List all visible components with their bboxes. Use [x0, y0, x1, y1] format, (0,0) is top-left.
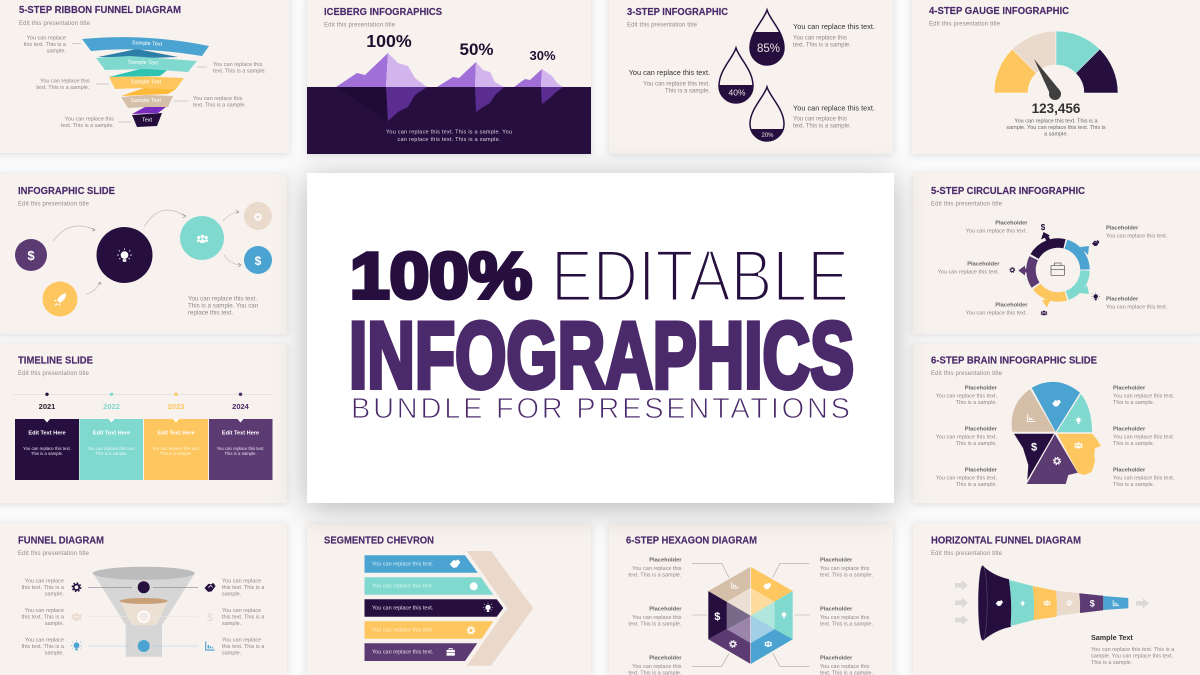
funnel text left: You can replace: [25, 578, 64, 584]
panel: 4-step gauge infographic: Edit this presentation title: [929, 22, 1001, 28]
dark water band: [307, 87, 591, 154]
panel: 5-step circular infographic: [913, 173, 1200, 334]
funnel text left: You can replace: [25, 638, 64, 644]
droplet labels: This is a sample.: [665, 88, 710, 94]
panel: infographic slide: Edit this presentation title: [18, 202, 90, 208]
brain labels right: This is a sample.: [1113, 482, 1155, 488]
chevron bar 2: [364, 577, 493, 595]
timeline card 2022: This is a sample.: [95, 451, 128, 456]
circular labels: Placeholder: [1106, 296, 1139, 302]
panel: segmented chevron: [307, 524, 591, 675]
funnel graphic: [93, 567, 195, 657]
timeline card 2024: This is a sample.: [224, 451, 257, 456]
panel: timeline slide: TIMELINE SLIDE: [18, 356, 93, 366]
brain labels left: [936, 386, 998, 488]
droplet 20%: [750, 87, 784, 141]
ribbon funnel callouts: text. This is a sample.: [193, 102, 247, 108]
head icons: $: [1031, 442, 1037, 454]
panel: iceberg infographics: Edit this presentation title: [324, 22, 396, 28]
brain labels left: You can replace this text.: [936, 394, 997, 400]
droplet labels: text. This is a sample.: [793, 124, 851, 130]
panel: 5-step circular infographic: Edit this presentation title: [931, 202, 1003, 208]
hexagon labels right: You can replace this: [820, 566, 870, 572]
funnel text left: You can replace: [25, 608, 64, 614]
timeline card 2023: Edit Text Here: [157, 430, 195, 436]
timeline card 2024: You can replace this text.: [217, 446, 264, 451]
circular labels: Placeholder: [995, 220, 1028, 226]
panel: horizontal funnel diagram: [913, 523, 1200, 675]
iceberg 30%: [514, 48, 563, 104]
gauge caption: [1006, 118, 1106, 138]
sample text block: This is a sample.: [1091, 660, 1133, 666]
panel: funnel diagram: [0, 523, 287, 675]
iceberg 100%: [336, 31, 427, 121]
timeline axis: [14, 393, 272, 411]
panel: 3-step infographic: Edit this presentation title: [627, 22, 698, 28]
node: gear: [244, 202, 272, 230]
chevron bar 5: You can replace this text.: [372, 650, 434, 656]
iceberg 30%: 30%: [529, 48, 556, 63]
circular labels: Placeholder: [967, 262, 1000, 268]
funnel text left: this text. This is a: [22, 644, 65, 650]
hero subheading: BUNDLE FOR PRESENTATIONS: [351, 393, 850, 425]
slide caption: You can replace this text.: [188, 296, 257, 302]
hexagon labels right: text. This is a sample.: [820, 622, 874, 628]
ribbon funnel callouts: text. This is a sample.: [36, 85, 90, 91]
droplet labels: You can replace this text.: [629, 68, 710, 77]
panel: infographic slide: INFOGRAPHIC SLIDE: [18, 186, 115, 197]
slide caption: replace this text.: [188, 310, 233, 316]
timeline card 2024: [209, 419, 272, 480]
sample text block: You can replace this text. This is a: [1091, 647, 1175, 653]
brain labels left: This is a sample.: [956, 441, 997, 447]
ribbon funnel chart: Text: [142, 118, 153, 124]
brain labels right: Placeholder: [1113, 386, 1146, 392]
brain labels right: You can replace this text.: [1113, 434, 1175, 440]
hero heading: EDITABLE: EDITABLE: [551, 236, 849, 317]
ribbon funnel callouts: You can replace this: [65, 116, 114, 122]
gauge caption: a sample.: [1044, 132, 1068, 138]
input arrows: [955, 580, 968, 625]
panel: 6-step hexagon diagram: [609, 524, 893, 675]
ribbon funnel chart: Sample Text: [128, 59, 159, 67]
brain labels right: [1113, 386, 1175, 488]
droplet labels: You can replace this text.: [793, 22, 875, 31]
funnel text right: You can replace: [222, 578, 261, 584]
chevron bar 4: [364, 621, 493, 639]
ribbon funnel callouts: text. This is a sample.: [61, 123, 114, 129]
node: rocket: [42, 282, 78, 316]
funnel text right: this text. This is a: [222, 585, 265, 591]
circular labels: You can replace this text.: [1106, 234, 1168, 240]
funnel text right: sample.: [222, 621, 242, 627]
ribbon funnel chart: [82, 37, 209, 127]
droplet 85%: [750, 10, 784, 65]
ribbon funnel callouts: [24, 36, 267, 129]
droplet labels: You can replace this text.: [643, 82, 710, 88]
hexagon connectors: [692, 563, 810, 666]
hexagon labels right: You can replace this: [820, 664, 870, 670]
droplet 20%: 20%: [761, 133, 774, 139]
ribbon funnel callouts: sample.: [47, 48, 66, 54]
iceberg 50%: [437, 40, 504, 112]
timeline card 2021: [15, 419, 79, 480]
gauge needle: [1034, 59, 1061, 100]
head segments: [1012, 382, 1101, 484]
timeline axis: 2021: [39, 402, 55, 411]
droplet labels: [629, 22, 875, 130]
hero heading: 100%: 100%: [350, 239, 532, 312]
droplet labels: You can replace this: [793, 116, 847, 122]
slide caption: This is a sample. You can: [188, 302, 259, 310]
hexagon labels left: [628, 558, 682, 675]
ribbon funnel callouts: text. This is a sample.: [213, 68, 267, 74]
funnel text right: [222, 578, 265, 656]
ribbon funnel callouts: You can replace this: [40, 78, 90, 84]
funnel segment icons: [996, 598, 1119, 608]
panel: horizontal funnel diagram: HORIZONTAL FUNNEL DIAGRAM: [931, 536, 1081, 546]
sample text block: [1091, 633, 1175, 666]
chevron bar 3: You can replace this text.: [372, 606, 434, 612]
brain labels right: This is a sample.: [1113, 441, 1155, 447]
funnel text left: this text. This is a: [22, 614, 65, 620]
sample text block: Sample Text: [1091, 633, 1133, 642]
droplet labels: text. This is a sample.: [793, 42, 851, 48]
droplet 85%: 85%: [757, 43, 780, 55]
panel: central hero: [307, 173, 894, 503]
hexagon labels left: text. This is a sample.: [628, 572, 682, 578]
timeline axis: 2024: [232, 402, 250, 411]
funnel text left: sample.: [45, 621, 64, 627]
brain labels left: Placeholder: [965, 426, 998, 432]
hexagon labels right: You can replace this: [820, 615, 870, 621]
panel: 5-step ribbon funnel diagram: Edit this presentation title: [19, 21, 91, 27]
hero heading: INFOGRAPHICS: INFOGRAPHICS: [349, 302, 854, 408]
tan chevron: [467, 551, 533, 666]
funnel text right: sample.: [222, 650, 242, 656]
circular labels: You can replace this text.: [966, 310, 1027, 316]
funnel text left: [22, 578, 65, 656]
iceberg 100%: 100%: [366, 31, 412, 51]
funnel text left: sample.: [45, 592, 64, 598]
timeline axis: 2022: [103, 402, 120, 411]
flow arrows: [53, 210, 241, 294]
ring icons: $: [1041, 223, 1046, 232]
ribbon funnel callouts: this text. This is a: [24, 42, 67, 48]
timeline card 2023: You can replace this text.: [152, 446, 200, 451]
hexagon labels right: [820, 558, 874, 675]
funnel segment icons: $: [1090, 598, 1095, 608]
funnel text left: sample.: [45, 650, 64, 656]
timeline card 2023: [144, 419, 208, 480]
timeline card 2021: This is a sample.: [31, 451, 63, 456]
ring arrow stubs: [1018, 232, 1089, 308]
panel: 6-step hexagon diagram: 6-STEP HEXAGON DIAGRAM: [626, 536, 757, 546]
timeline card 2024: Edit Text Here: [222, 430, 259, 436]
funnel text right: You can replace: [222, 608, 261, 614]
ribbon funnel chart: Sample Text: [131, 80, 162, 86]
chevron bar 2: You can replace this text.: [372, 584, 434, 590]
panel: iceberg infographics: ICEBERG INFOGRAPHICS: [324, 7, 442, 18]
droplet labels: You can replace this text.: [793, 104, 875, 112]
funnel text left: this text. This is a: [22, 585, 65, 591]
node: light bulb: [96, 227, 152, 283]
hexagon labels right: text. This is a sample.: [820, 572, 874, 578]
panel: segmented chevron: SEGMENTED CHEVRON: [324, 536, 434, 546]
panel: 5-step ribbon funnel diagram: [0, 0, 289, 153]
chevron bar 1: [364, 555, 478, 573]
hexagon labels right: Placeholder: [820, 558, 853, 564]
timeline card 2021: You can replace this text.: [23, 446, 71, 451]
panel: timeline slide: Edit this presentation title: [18, 371, 90, 377]
icon: briefcase: [1051, 263, 1064, 276]
brain labels left: Placeholder: [965, 468, 998, 474]
chevron bar 3: [364, 599, 503, 617]
brain labels left: This is a sample.: [956, 400, 997, 406]
chevron bar 1: You can replace this text.: [372, 562, 434, 568]
ribbon funnel callouts: You can replace this: [193, 96, 243, 102]
output arrow: [1136, 598, 1149, 609]
node: blue dollar: [244, 246, 272, 274]
circular ring segments: [1031, 243, 1085, 297]
hexagon labels left: text. This is a sample.: [628, 622, 682, 628]
timeline axis: 2023: [168, 402, 184, 411]
gauge caption: You can replace this text. This is a: [1014, 118, 1099, 124]
funnel text right: You can replace: [222, 638, 261, 644]
brain labels right: Placeholder: [1113, 468, 1146, 474]
brain labels right: You can replace this text.: [1113, 476, 1175, 482]
panel: horizontal funnel diagram: Edit this presentation title: [931, 551, 1003, 557]
circular labels: You can replace this text.: [966, 228, 1027, 234]
iceberg 50%: 50%: [459, 40, 494, 59]
circular labels: Placeholder: [1106, 226, 1139, 232]
panel: funnel diagram: Edit this presentation title: [18, 551, 90, 557]
gauge chart: [994, 31, 1118, 93]
panel: 6-step brain infographic slide: 6-STEP BRAIN INFOGRAPHIC SLIDE: [931, 356, 1097, 366]
timeline card 2022: You can replace this text.: [88, 446, 135, 451]
brain labels left: You can replace this text.: [936, 476, 997, 482]
node: people: [180, 216, 224, 260]
hexagon labels right: Placeholder: [820, 606, 853, 612]
panel: 4-step gauge infographic: [912, 0, 1200, 154]
circular labels: [938, 220, 1168, 316]
ring icons: [1010, 223, 1100, 315]
timeline card 2022: [80, 419, 143, 480]
hexagon labels left: You can replace this: [632, 664, 682, 670]
iceberg caption: You can replace this text. This is a sample. You: [386, 130, 512, 136]
panel: infographic slide: [0, 174, 287, 334]
funnel text right: this text. This is a: [222, 614, 265, 620]
panel: 3-step infographic: 3-STEP INFOGRAPHIC: [627, 7, 728, 18]
hexagon labels left: Placeholder: [649, 606, 682, 612]
circular labels: You can replace this text.: [938, 270, 999, 276]
chevron bar 5: [364, 643, 477, 661]
hexagon icons: [714, 582, 788, 647]
node: dollar: $: [27, 248, 35, 263]
panel: 4-step gauge infographic: 4-STEP GAUGE INFOGRAPHIC: [929, 6, 1069, 17]
gauge caption: sample. You can replace this text. This is: [1006, 125, 1106, 131]
hexagon icons: $: [714, 611, 720, 623]
panel: 5-step circular infographic: 5-STEP CIRCULAR INFOGRAPHIC: [931, 186, 1085, 197]
panel: 6-step brain infographic slide: Edit this presentation title: [931, 371, 1003, 377]
panel: funnel diagram: FUNNEL DIAGRAM: [18, 536, 104, 546]
timeline card 2021: Edit Text Here: [28, 430, 66, 436]
timeline card 2022: Edit Text Here: [93, 430, 130, 436]
funnel text right: sample.: [222, 592, 242, 598]
brain labels right: Placeholder: [1113, 426, 1146, 432]
brain labels left: You can replace this text.: [936, 434, 997, 440]
droplet 40%: 40%: [728, 88, 746, 98]
droplet labels: You can replace this: [793, 36, 847, 42]
gauge value: 123,456: [1032, 101, 1081, 116]
hexagon labels left: Placeholder: [649, 558, 682, 564]
chevron bar 4: You can replace this text.: [372, 628, 434, 634]
ribbon funnel chart: Sample Text: [132, 40, 163, 48]
ribbon funnel callouts: You can replace this: [213, 62, 263, 68]
circular labels: Placeholder: [995, 302, 1028, 308]
iceberg caption: [386, 130, 512, 143]
brain labels right: You can replace this text.: [1113, 394, 1175, 400]
hexagon labels left: You can replace this: [632, 566, 682, 572]
brain labels left: This is a sample.: [956, 482, 997, 488]
ribbon funnel callouts: You can replace: [27, 36, 66, 42]
droplet 40%: [719, 48, 753, 103]
node: blue dollar: $: [255, 254, 262, 268]
funnel side icons: [71, 583, 216, 650]
iceberg caption: can replace this text. This is a sample.: [398, 137, 501, 143]
funnel side icons: $: [207, 612, 213, 624]
hexagon chart: [708, 567, 793, 664]
brain labels right: This is a sample.: [1113, 400, 1155, 406]
brain labels left: Placeholder: [965, 386, 998, 392]
funnel text right: this text. This is a: [222, 644, 265, 650]
hexagon labels left: You can replace this: [632, 615, 682, 621]
panel: 3-step infographic: [609, 0, 893, 154]
slide caption: [188, 296, 259, 316]
ribbon funnel chart: Sample Text: [131, 98, 162, 104]
panel: 5-step ribbon funnel diagram: 5-STEP RIBBON FUNNEL DIAGRAM: [19, 5, 181, 16]
sample text block: sample. You can replace this text.: [1091, 654, 1173, 660]
funnel connector lines: [88, 587, 198, 646]
horizontal funnel: [978, 566, 1128, 641]
panel: timeline slide: [0, 344, 287, 503]
hexagon labels left: Placeholder: [649, 656, 682, 662]
panel: iceberg infographics: [307, 0, 591, 154]
hexagon labels right: Placeholder: [820, 656, 853, 662]
node: dollar: [15, 239, 47, 271]
circular labels: You can replace this text.: [1106, 304, 1168, 310]
panel: 6-step brain infographic slide: [913, 344, 1200, 503]
timeline card 2023: This is a sample.: [160, 451, 192, 456]
head icons: [1027, 400, 1083, 464]
